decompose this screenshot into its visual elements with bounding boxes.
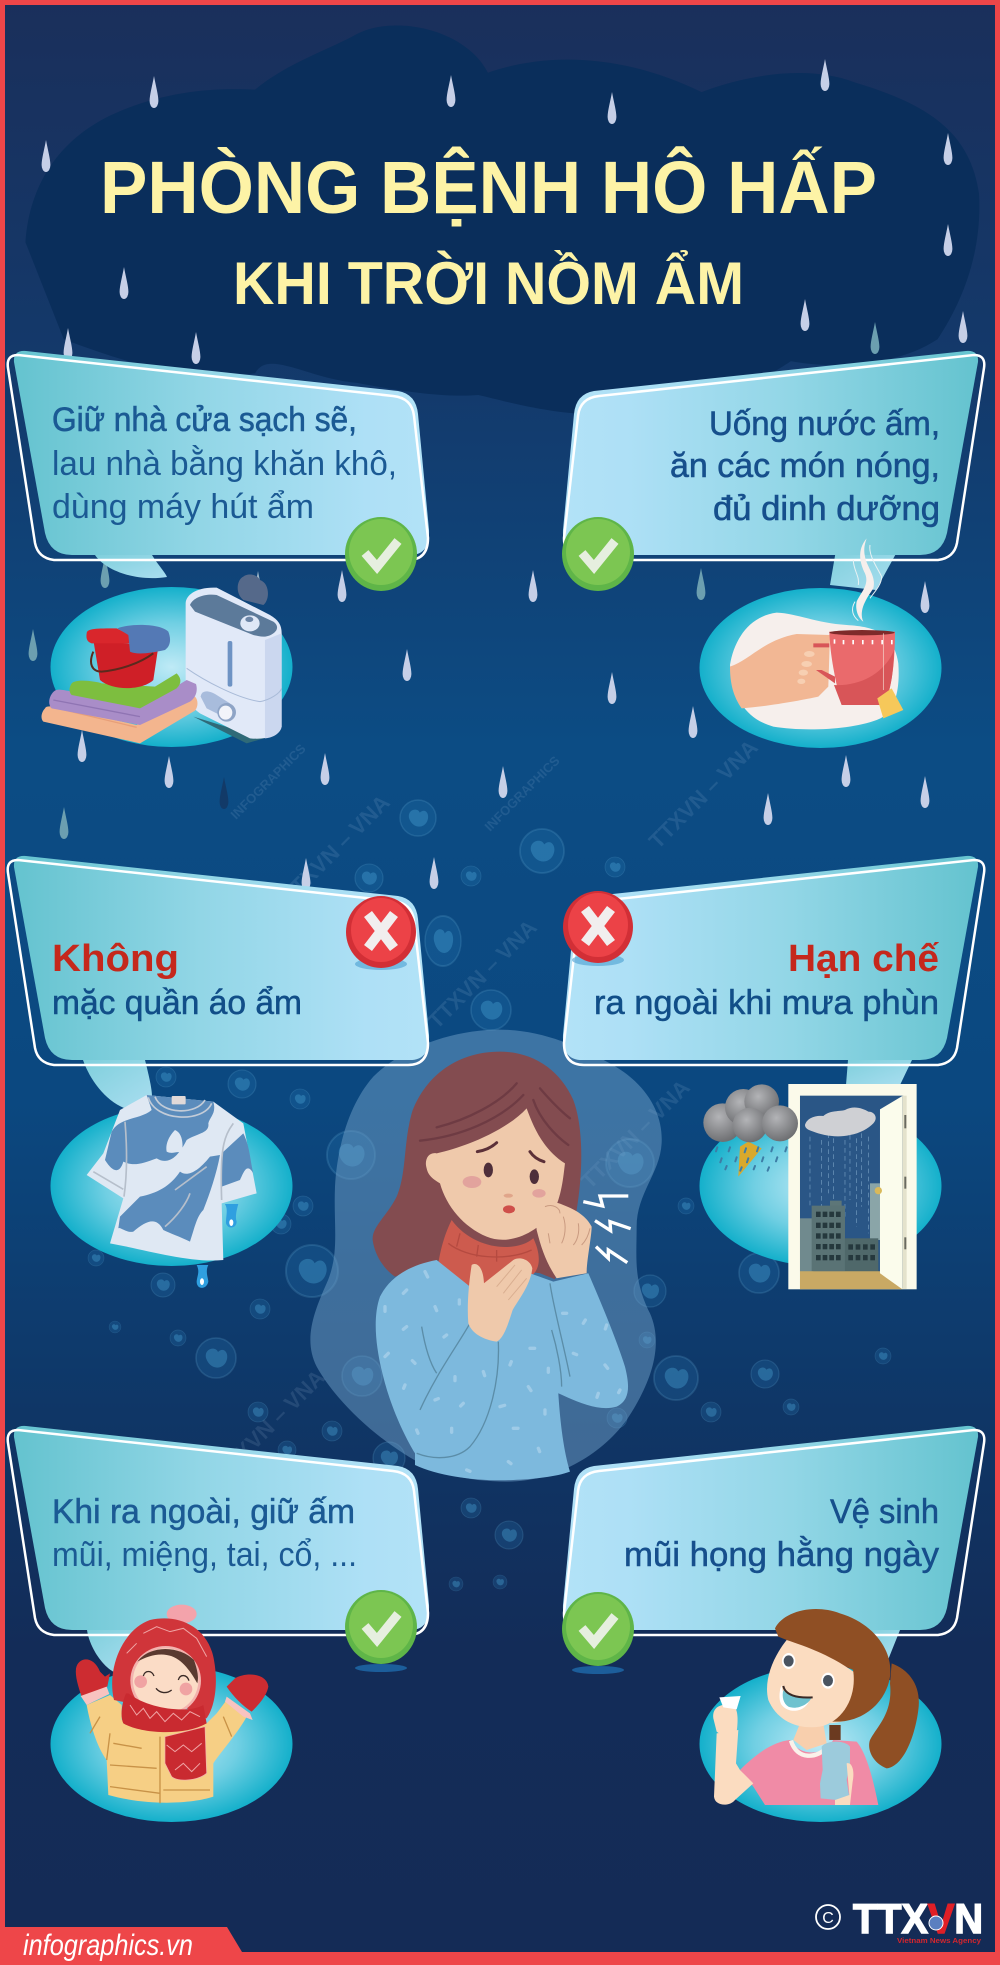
panel: warm water and food [563,351,984,560]
hand at mouth [536,1202,592,1278]
scarf [438,1220,539,1287]
panel: keep the house clean: lau nhà bằng khăn khô, [52,445,397,483]
panel: limit going out in drizzle: ra ngoài khi mưa phùn [594,984,939,1022]
panel: clean nose and throat: Vệ sinh [830,1493,939,1531]
hand on chest [468,1258,532,1342]
icon: cross badge [346,896,416,970]
panel: warm water and food: ăn các món nóng, [670,447,940,485]
title: KHI TRỜI NỒM ẨM [233,250,744,317]
logo: C [822,1910,834,1927]
watermarks: TTXVN – VNA [644,735,763,854]
panel: warm water and food: Uống nước ấm, [709,405,940,443]
halo behind woman [310,1030,662,1482]
watermarks [211,735,763,1484]
watermarks: INFOGRAPHICS [482,753,563,834]
panel: keep warm outdoors: mũi, miệng, tai, cổ, ... [52,1536,357,1574]
icon: humidifier, bucket and towels [42,574,282,743]
watermarks: TTXVN – VNA [276,790,395,909]
icon: girl gargling [713,1609,919,1805]
hair strands [420,1083,570,1145]
panel: do not wear damp clothes [8,856,429,1065]
footer site name: infographics.vn [23,1929,193,1962]
icon: check badge [562,517,634,591]
sweater [376,1260,628,1480]
storm cloud behind title [26,26,979,415]
icon: open door with rain and storm cloud [703,1084,917,1289]
panel: do not wear damp clothes: Không [52,938,179,980]
panel: keep warm outdoors [8,1426,429,1635]
icon: check badge [345,1590,417,1672]
face features [463,1143,546,1213]
panel: keep the house clean: Giữ nhà cửa sạch sẽ, [52,401,357,439]
raindrops [29,59,967,890]
logo: TTXVN [853,1895,983,1942]
watermarks: TTXVN – VNA [576,1075,695,1194]
storm cloud [703,1084,798,1177]
connector tails [83,550,912,1672]
panel: clean nose and throat: mũi họng hằng ngày [624,1536,939,1574]
panel: keep warm outdoors: Khi ra ngoài, giữ ấm [52,1493,355,1531]
panel: warm water and food: đủ dinh dưỡng [713,490,940,528]
panel: limit going out in drizzle [563,856,984,1065]
panel: clean nose and throat [563,1426,984,1635]
icon: check badge [345,517,417,591]
panel: do not wear damp clothes: mặc quần áo ẩm [52,984,302,1022]
icon: hand holding hot mug [730,538,903,729]
panel: keep the house clean [8,351,429,560]
watermarks: TTXVN – VNA [211,1365,330,1484]
hair [373,1052,581,1279]
title: PHÒNG BỆNH HÔ HẤP [100,146,877,229]
logo: Vietnam News Agency [897,1936,982,1945]
panel: limit going out in drizzle: Hạn chế [788,938,940,980]
coughing woman illustration [310,1030,662,1482]
cough lines [583,1196,631,1263]
icon: child in winter clothes [76,1605,268,1803]
panel: keep the house clean: dùng máy hút ẩm [52,488,314,526]
face [426,1108,565,1240]
water bubbles background [88,800,891,1591]
illustration circles [50,587,942,1822]
watermarks: TTXVN – VNA [423,915,542,1034]
watermarks: INFOGRAPHICS [228,741,309,822]
icon: damp t-shirt [87,1095,257,1288]
title [100,146,877,317]
icon: cross badge [563,891,633,966]
icon: check badge [562,1592,634,1674]
